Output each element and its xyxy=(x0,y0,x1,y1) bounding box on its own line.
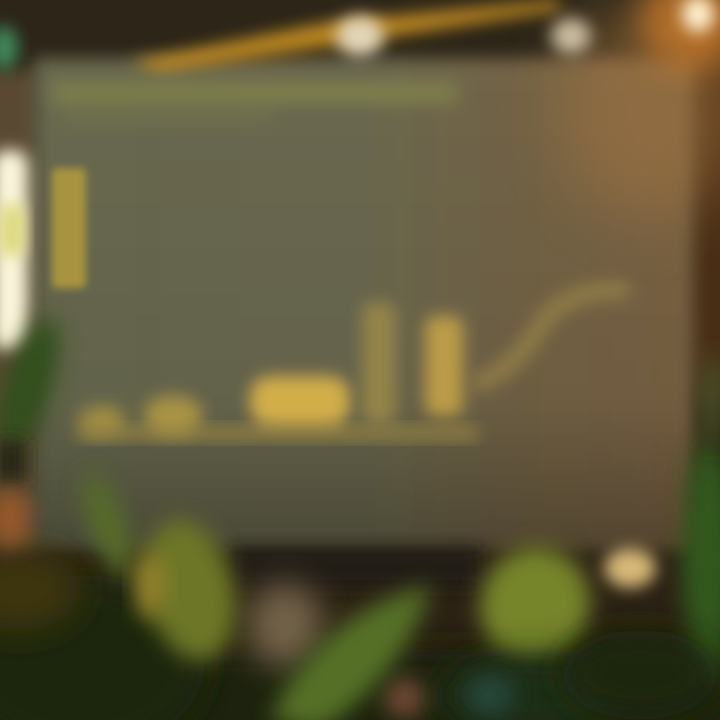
right large leaf xyxy=(467,535,603,675)
trend line xyxy=(480,290,622,382)
screen stand xyxy=(230,548,480,588)
leaf left of centre xyxy=(72,467,144,583)
left upper leaf xyxy=(0,311,72,459)
centre long leaf xyxy=(270,585,430,720)
small bar middle xyxy=(143,395,203,435)
orange ceiling beam xyxy=(130,0,560,72)
foreground plants xyxy=(0,311,720,720)
blurred title text xyxy=(52,82,457,122)
left window light xyxy=(0,26,28,350)
dark base foliage xyxy=(0,650,720,720)
left dark plant xyxy=(0,575,205,720)
pale floor behind plants xyxy=(247,583,323,667)
lower teal leaf xyxy=(466,675,514,715)
small bar left xyxy=(78,405,126,435)
presentation board xyxy=(34,0,720,548)
right plant xyxy=(682,440,720,680)
blurred vertical axis label xyxy=(52,168,86,288)
blurred bar and line chart xyxy=(78,290,622,440)
tall bar xyxy=(362,302,396,424)
tall bright bar xyxy=(425,316,463,416)
wide bright bar xyxy=(250,376,350,426)
ceiling lights xyxy=(336,0,720,70)
glowing lamp spot xyxy=(604,548,656,588)
chart baseline xyxy=(78,426,478,440)
